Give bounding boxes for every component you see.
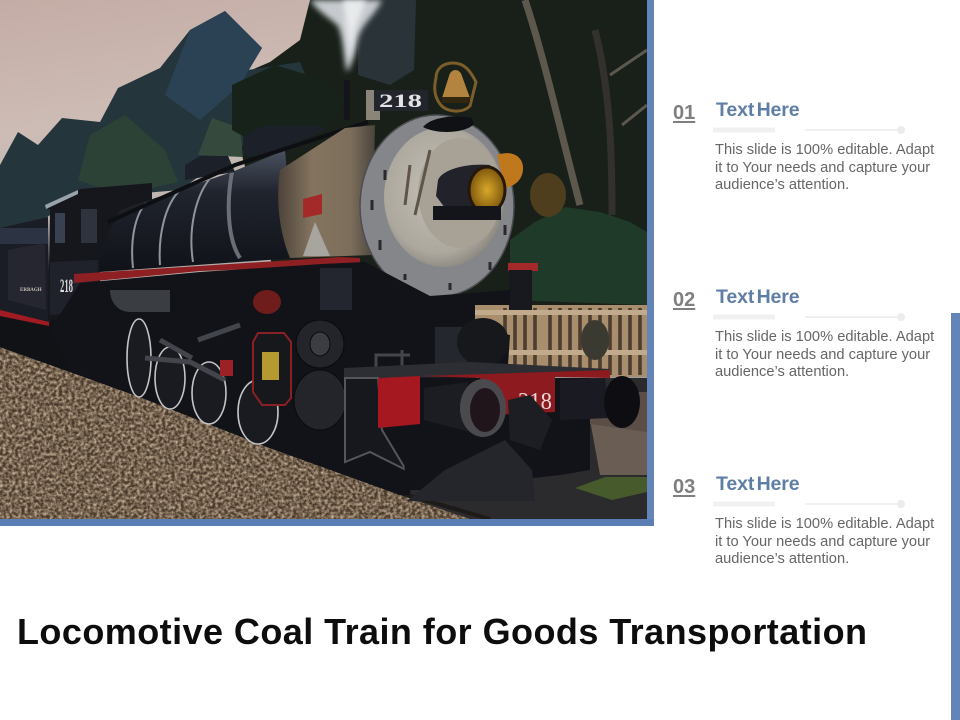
- body text 02: it to Your needs and capture your: [715, 346, 930, 362]
- blue frame right: [647, 0, 654, 526]
- item 01: [673, 99, 934, 193]
- ground: ballast stones: [0, 347, 470, 519]
- right edge accent bar: [951, 313, 960, 720]
- red valve gear detail: [220, 360, 233, 376]
- lower steam drum: [110, 290, 170, 312]
- heading 02: Text Here: [716, 286, 800, 308]
- bracket below running board right: [509, 270, 532, 310]
- steam pipe casting: [303, 222, 330, 256]
- pilot plow: [407, 440, 535, 501]
- number 01: 01: [673, 102, 695, 124]
- tender car: [0, 217, 50, 326]
- background: green bush: [510, 207, 647, 305]
- heading 03: Text Here: [716, 473, 800, 495]
- picket fence: [475, 305, 647, 377]
- item 03: [673, 473, 934, 567]
- number 02: 02: [673, 289, 695, 311]
- red running board: [74, 257, 360, 283]
- body text 03: This slide is 100% editable. Adapt: [715, 516, 934, 532]
- headlight: [433, 153, 523, 220]
- ground: rail: [0, 345, 490, 519]
- red buffer beam middle: [420, 370, 610, 415]
- front frame block: [378, 378, 590, 490]
- deck railing: [376, 350, 410, 372]
- smokebox front ring: [360, 115, 514, 297]
- body text 01: it to Your needs and capture your: [715, 160, 930, 176]
- heading 01: Text Here: [716, 99, 800, 121]
- left buffer: [424, 379, 506, 437]
- cylinder drums: [294, 320, 346, 430]
- step ladder: [345, 378, 406, 470]
- background: orange foliage: [530, 173, 566, 217]
- background: blue-green pines on the left: [0, 11, 345, 255]
- handrail: [108, 122, 368, 222]
- faint divider 01: [713, 126, 905, 134]
- central coupler: [508, 395, 552, 450]
- footplate deck: [344, 362, 610, 378]
- red buffer beam left: [378, 376, 420, 428]
- cylinder panel with yellow plate: [253, 333, 291, 405]
- body text 02: [715, 329, 934, 380]
- driving wheels: [127, 319, 278, 444]
- body text 03: [715, 516, 934, 567]
- sand dome post: [435, 327, 470, 365]
- frame box: [320, 268, 352, 310]
- body text 02: This slide is 100% editable. Adapt: [715, 329, 934, 345]
- faint divider 02: [713, 313, 905, 321]
- red running board right end: [508, 263, 538, 271]
- running gear mass: [50, 262, 510, 495]
- ground right: upper gravel: [590, 392, 647, 432]
- number plate 218: 218: [379, 91, 422, 112]
- cab: [45, 183, 152, 320]
- body text 03: it to Your needs and capture your: [715, 534, 930, 550]
- body text 01: [715, 142, 934, 193]
- background: pale tree trunks: [525, 0, 647, 215]
- front number on beam: 218: [518, 389, 552, 415]
- connecting rods: [145, 325, 240, 380]
- ground right: track bed: [400, 378, 647, 519]
- photo background: dusk sky: [0, 0, 647, 519]
- ground: ballast gravel base: [0, 347, 470, 519]
- undercarriage: [0, 300, 150, 400]
- item 02: [673, 286, 934, 380]
- tender car: ERBAGH: [20, 288, 42, 293]
- faint divider 03: [713, 500, 905, 508]
- ground right: grass patch: [575, 477, 647, 500]
- body text 01: audience’s attention.: [715, 177, 849, 193]
- blue frame bottom: [0, 519, 654, 526]
- rusted boiler section: [278, 125, 375, 258]
- boiler domes: [185, 126, 327, 180]
- chimney stack: [344, 80, 350, 120]
- title: Locomotive Coal Train for Goods Transportation: [17, 611, 867, 652]
- red valve detail upper: [253, 290, 281, 314]
- photo panel: steam locomotive 218 with blue frame: [0, 0, 654, 526]
- red builder plate: [303, 194, 322, 218]
- body text 01: This slide is 100% editable. Adapt: [715, 142, 934, 158]
- smoke plume: [310, 0, 416, 85]
- background: dark tree canopy on the right: [235, 0, 647, 330]
- body text 02: audience’s attention.: [715, 364, 849, 380]
- boiler barrel: [100, 150, 295, 272]
- body text 03: audience’s attention.: [715, 551, 849, 567]
- number plate 218: [366, 90, 428, 120]
- cab: 218: [60, 276, 73, 297]
- number 03: 03: [673, 476, 695, 498]
- right round drum: [457, 318, 509, 366]
- right buffer: [560, 376, 640, 428]
- brass bell: [423, 63, 476, 132]
- ground right: gravel: [590, 420, 647, 475]
